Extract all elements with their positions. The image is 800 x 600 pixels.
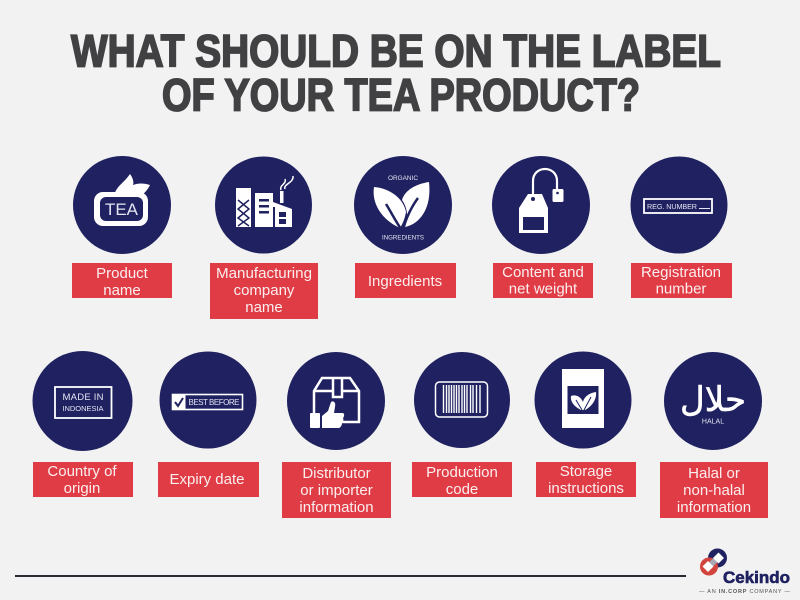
title: OF YOUR TEA PRODUCT? [162,70,640,120]
item: manufacturing company name: Manufacturing [216,265,312,282]
item: distributor or importer information [282,352,391,518]
item: content and net weight [492,156,593,298]
icon: tea label [94,174,150,226]
item: manufacturing company name: name [245,299,283,316]
icon: made in indonesia [55,387,112,418]
item: manufacturing company name [210,156,318,319]
item: halal or non-halal information [660,352,768,518]
icon: halal: HALAL [702,418,724,426]
item: expiry date [158,352,259,497]
item: storage instructions [534,352,636,497]
item: content and net weight: Content and [502,264,584,281]
icon: factory [236,176,293,227]
icon: tea pouch [562,369,604,428]
item: ingredients [354,156,456,298]
icon: made in indonesia: MADE IN [62,392,104,403]
icon: barcode [436,382,488,417]
icon: best before [172,394,242,410]
icon: best before: BEST BEFORE [188,398,240,407]
logo: Cekindo: — AN IN.CORP COMPANY — [699,589,790,595]
icon: made in indonesia: INDONESIA [62,404,104,413]
icon: box with thumbs up [310,378,359,428]
item: distributor or importer information: information [299,499,374,516]
item: registration number: Registration [641,264,721,281]
item: country of origin: Country of [47,463,117,480]
logo: Cekindo [699,548,790,595]
logo: Cekindo: Cekindo [723,568,790,587]
title [71,26,721,120]
item: product name: name [103,282,141,299]
item: country of origin [32,351,133,497]
icon: reg number box [644,199,712,213]
item: distributor or importer information: or importer [300,482,373,499]
item: production code [412,352,512,498]
item: production code: code [446,481,478,498]
item: registration number: number [656,280,706,298]
icon: reg number box: REG. NUMBER [647,202,697,211]
item: halal or non-halal information: information [677,499,751,516]
item: halal or non-halal information: Halal or [688,465,740,482]
item: registration number [630,156,732,298]
icon: tea label: TEA [105,200,139,219]
icon: halal: حلال [680,380,746,420]
item: expiry date: Expiry date [169,471,245,488]
item: production code: Production [426,464,498,481]
icon: organic leaves: ORGANIC [388,175,418,182]
icon: tea bag tag [519,169,564,233]
item: product name [72,156,172,299]
item: product name: Product [96,265,149,282]
item: manufacturing company name: company [234,282,295,299]
item: storage instructions: Storage [560,463,612,480]
item: content and net weight: net weight [509,280,578,298]
item: halal or non-halal information: non-halal [683,482,745,499]
item: storage instructions: instructions [548,480,624,497]
icon: organic leaves: INGREDIENTS [382,234,424,242]
item: country of origin: origin [64,480,100,497]
icon: organic leaves [374,175,429,242]
item: distributor or importer information: Distributor [302,465,371,482]
item: ingredients: Ingredients [368,273,442,290]
